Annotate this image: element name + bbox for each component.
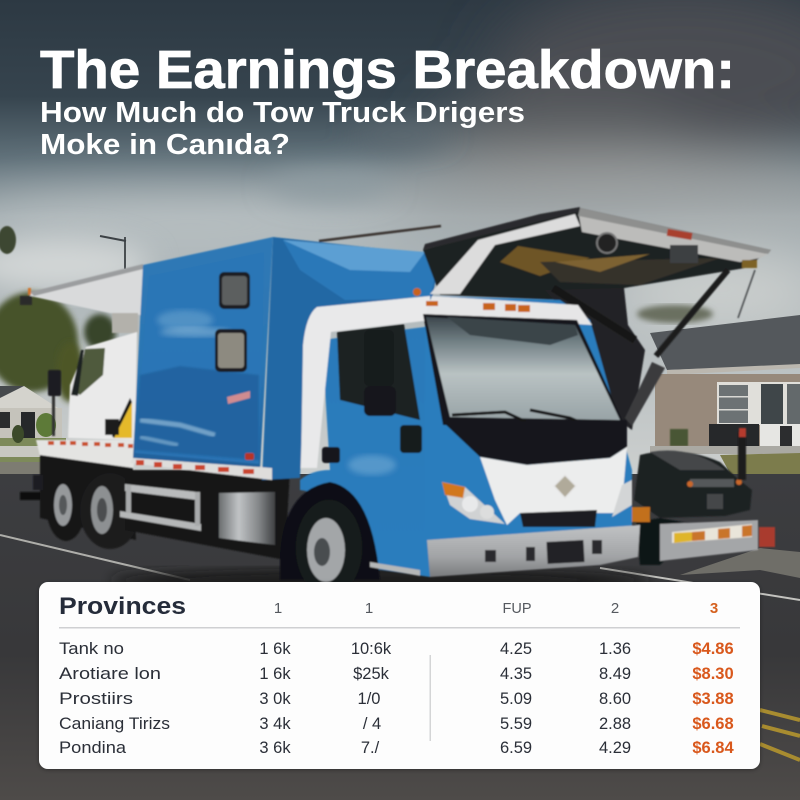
blue upper body and roof bbox=[262, 237, 440, 480]
column 1 values bbox=[259, 640, 291, 757]
column 5 highlighted values: $6.84 bbox=[692, 739, 734, 757]
rear wheels bbox=[46, 469, 140, 549]
table header: FUP bbox=[502, 600, 532, 617]
column 5 highlighted values: $4.86 bbox=[692, 640, 734, 658]
table header: 3 bbox=[710, 600, 718, 617]
column 4 values: 2.88 bbox=[599, 715, 631, 733]
blue box with windows bbox=[133, 237, 273, 468]
column 2 values: 10:6k bbox=[351, 640, 392, 658]
column 2 values: / 4 bbox=[363, 715, 381, 733]
cab front with windshield bbox=[413, 288, 632, 545]
subtitle line 2: Moke in Canıda? bbox=[40, 129, 290, 161]
column 3 values: 4.25 bbox=[500, 640, 532, 658]
column 4 values: 8.49 bbox=[599, 665, 631, 683]
table header: 1 bbox=[365, 600, 373, 617]
column 1 values: 3 4k bbox=[259, 715, 291, 733]
road bbox=[0, 462, 800, 800]
column 4 values: 4.29 bbox=[599, 739, 631, 757]
column 5 highlighted values: $6.68 bbox=[692, 715, 734, 733]
row labels: Arotiare lon bbox=[59, 664, 161, 683]
rear chassis with reflective strip bbox=[20, 440, 136, 540]
white rear cab bbox=[48, 332, 137, 440]
column 2 values bbox=[351, 640, 392, 757]
column 5 highlighted values: $8.30 bbox=[692, 665, 734, 683]
column 1 values: 1 6k bbox=[259, 665, 291, 683]
reflective strip under box bbox=[130, 458, 272, 480]
title block bbox=[40, 40, 735, 161]
white boom arm at rear bbox=[20, 264, 143, 333]
subtitle line 1: How Much do Tow Truck Drigers bbox=[40, 97, 525, 129]
column 1 values: 3 6k bbox=[259, 739, 291, 757]
column 3 values: 5.59 bbox=[500, 715, 532, 733]
towed car bbox=[634, 428, 752, 518]
raised flatbed deck bbox=[423, 207, 771, 300]
background: cloudy sky bbox=[0, 0, 800, 480]
row labels: Tank no bbox=[59, 639, 124, 658]
column 3 values: 4.35 bbox=[500, 665, 532, 683]
column 5 highlighted values bbox=[692, 640, 734, 757]
cab door side bbox=[300, 296, 445, 577]
column 4 values: 1.36 bbox=[599, 640, 631, 658]
rear tow lift bar bbox=[632, 507, 775, 565]
column 1 values: 1 6k bbox=[259, 640, 291, 658]
column 4 values: 8.60 bbox=[599, 690, 631, 708]
front bumper bbox=[427, 525, 640, 577]
column 3 values bbox=[500, 640, 532, 757]
column 1 values: 3 0k bbox=[259, 690, 291, 708]
front wheel bbox=[280, 482, 420, 596]
tow truck bbox=[20, 207, 775, 596]
row labels: Prostiirs bbox=[59, 689, 133, 708]
column 3 values: 6.59 bbox=[500, 739, 532, 757]
main heading: The Earnings Breakdown: bbox=[40, 40, 735, 100]
column 5 highlighted values: $3.88 bbox=[692, 690, 734, 708]
column 4 values bbox=[599, 640, 631, 757]
row labels bbox=[59, 639, 170, 757]
background: trees and house on the left bbox=[0, 226, 126, 474]
row labels: Caniang Tirizs bbox=[59, 714, 170, 733]
steps and fuel tank bbox=[120, 470, 290, 560]
panel: earnings table bbox=[39, 582, 760, 769]
hydraulic arm bbox=[319, 226, 755, 430]
background: house, lawn and pavement on the right bbox=[637, 305, 800, 576]
column 2 values: 7./ bbox=[361, 739, 380, 757]
table header: 2 bbox=[611, 600, 619, 617]
column 2 values: 1/0 bbox=[358, 690, 380, 708]
column 2 values: $25k bbox=[353, 665, 390, 683]
column 3 values: 5.09 bbox=[500, 690, 532, 708]
table header bbox=[59, 593, 718, 620]
table header: 1 bbox=[274, 600, 282, 617]
row labels: Pondina bbox=[59, 738, 127, 757]
table header: Provinces bbox=[59, 593, 186, 620]
